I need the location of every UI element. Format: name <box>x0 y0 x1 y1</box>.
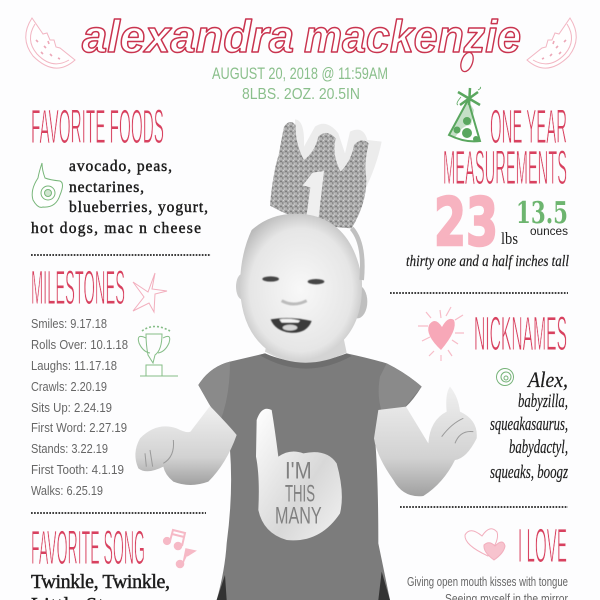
nickname list: babydactyl, <box>509 437 568 458</box>
sleeves shading <box>198 362 422 427</box>
head <box>240 214 362 360</box>
milestone dates: Walks: 6.25.19 <box>31 484 103 498</box>
pants <box>217 572 390 600</box>
nose <box>282 301 307 304</box>
milestone dates: Rolls Over: 10.1.18 <box>31 338 128 352</box>
icon: two hearts <box>465 529 505 560</box>
icon: trophy <box>138 326 178 376</box>
crown front <box>270 122 369 228</box>
birth details <box>212 64 388 103</box>
shirt print text: I'M <box>285 457 312 484</box>
title: baby name: mackenzie <box>304 11 521 62</box>
shirt print text <box>275 457 322 529</box>
icon: heart with rays <box>418 307 464 361</box>
icon: avocado <box>32 163 62 207</box>
icon: watermelon right <box>527 18 576 68</box>
left arm and fist <box>135 406 237 485</box>
nickname list: Alex, <box>526 367 568 392</box>
milestone dates: Stands: 3.22.19 <box>31 442 108 456</box>
title: baby name <box>82 11 521 73</box>
nickname list: babyzilla, <box>518 391 568 412</box>
photo: baby wearing glitter crown <box>135 119 477 600</box>
crown number one <box>303 171 324 217</box>
ears <box>236 274 248 299</box>
panel: milestones <box>31 262 178 498</box>
weight pounds: 23 <box>434 184 498 261</box>
milestone dates: First Word: 2.27.19 <box>31 421 127 435</box>
panel: one year measurements: lbs <box>501 229 518 248</box>
milestone dates: Smiles: 9.17.18 <box>31 317 107 331</box>
icon: music notes <box>163 530 195 568</box>
song title: Twinkle, Twinkle, <box>31 571 170 593</box>
panel: favorite foods: blueberries, yogurt, <box>69 199 208 216</box>
icon: party hat <box>449 87 481 142</box>
neck <box>265 337 347 363</box>
icon: star <box>133 273 167 312</box>
headband <box>352 228 362 280</box>
left fist creases <box>145 440 174 467</box>
panel: one year measurements <box>406 87 569 270</box>
icon: green spiral <box>496 368 514 386</box>
milestone dates: First Tooth: 4.1.19 <box>31 463 124 477</box>
right arm and pointing hand <box>374 387 477 496</box>
shirt hand print <box>256 409 342 540</box>
title: baby name: alexandra <box>82 11 294 62</box>
milestone dates <box>31 317 128 498</box>
panel: favorite foods <box>31 101 208 237</box>
milestone dates: Sits Up: 2.24.19 <box>31 401 112 415</box>
birth details: AUGUST 20, 2018 @ 11:59AM <box>212 64 388 83</box>
text: MILESTONES <box>31 262 125 315</box>
shirt print text: THIS <box>285 481 315 508</box>
weight ounces: 13.5 <box>516 196 568 231</box>
milestone dates: Crawls: 2.20.19 <box>31 380 107 394</box>
collar <box>259 353 352 369</box>
panel: favorite song <box>31 522 195 600</box>
panel: one year measurements: ounces <box>530 224 568 238</box>
text: FAVORITE SONG <box>31 522 145 575</box>
panel: favorite foods: hot dogs, mac n cheese <box>31 220 201 237</box>
eyes <box>262 276 324 284</box>
right hand creases <box>442 418 473 443</box>
milestone dates: Laughs: 11.17.18 <box>31 359 117 373</box>
panel: favorite foods: nectarines, <box>69 179 144 196</box>
text: FAVORITE FOODS <box>31 101 164 154</box>
food list: avocado, peas, <box>69 158 172 175</box>
icon: watermelon left <box>26 18 75 68</box>
birth details: 8LBS. 2OZ. 20.5IN <box>242 86 360 103</box>
t-shirt <box>198 353 422 600</box>
crown back <box>295 119 382 193</box>
face features <box>262 276 324 333</box>
shirt print text: MANY <box>275 502 322 529</box>
panel: nicknames <box>418 307 568 483</box>
nickname list <box>490 367 568 483</box>
panel: i love <box>407 520 568 600</box>
mouth <box>271 318 312 333</box>
